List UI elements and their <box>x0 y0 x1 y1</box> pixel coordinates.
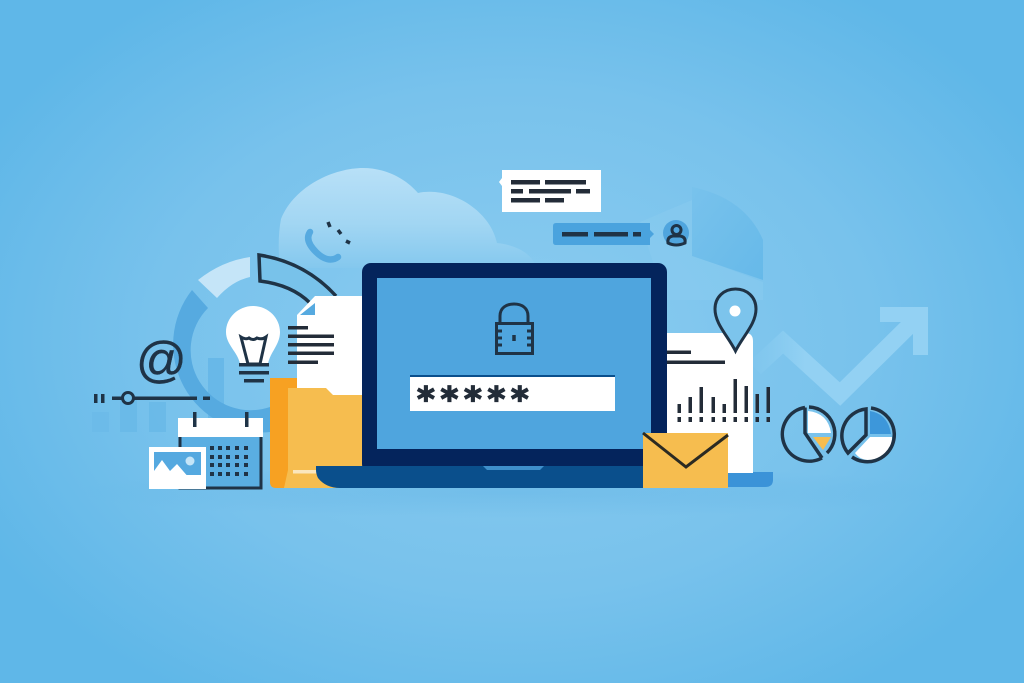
password field <box>410 375 615 420</box>
calendar icon <box>178 412 263 488</box>
growth arrow <box>755 307 928 394</box>
bar chart <box>678 379 770 422</box>
envelope icon <box>643 433 728 488</box>
laptop screen <box>377 278 651 449</box>
document left <box>288 296 364 402</box>
laptop <box>316 263 667 488</box>
location pin icon <box>715 289 756 351</box>
chat bubble blue <box>553 223 654 245</box>
cloud <box>279 168 534 268</box>
faint bars left <box>92 358 224 432</box>
folder <box>270 378 364 488</box>
phone icon <box>308 222 350 259</box>
laptop base <box>316 466 650 488</box>
donut chart <box>173 255 336 432</box>
pie chart left <box>782 407 835 461</box>
pie chart right <box>842 408 894 462</box>
chat bubble white <box>499 170 601 212</box>
faint pie chart top right <box>640 187 763 300</box>
password asterisks: ***** <box>417 380 534 420</box>
right laptop base <box>725 472 773 487</box>
slider control <box>94 392 210 404</box>
at sign icon: @ <box>136 332 187 388</box>
picture icon <box>149 447 206 489</box>
light bulb icon <box>226 306 280 382</box>
document right <box>660 333 753 473</box>
padlock icon <box>496 304 532 354</box>
user avatar icon <box>663 220 689 246</box>
laptop bezel <box>362 263 667 473</box>
ground shadow <box>72 466 952 518</box>
trackpad notch <box>483 466 544 470</box>
